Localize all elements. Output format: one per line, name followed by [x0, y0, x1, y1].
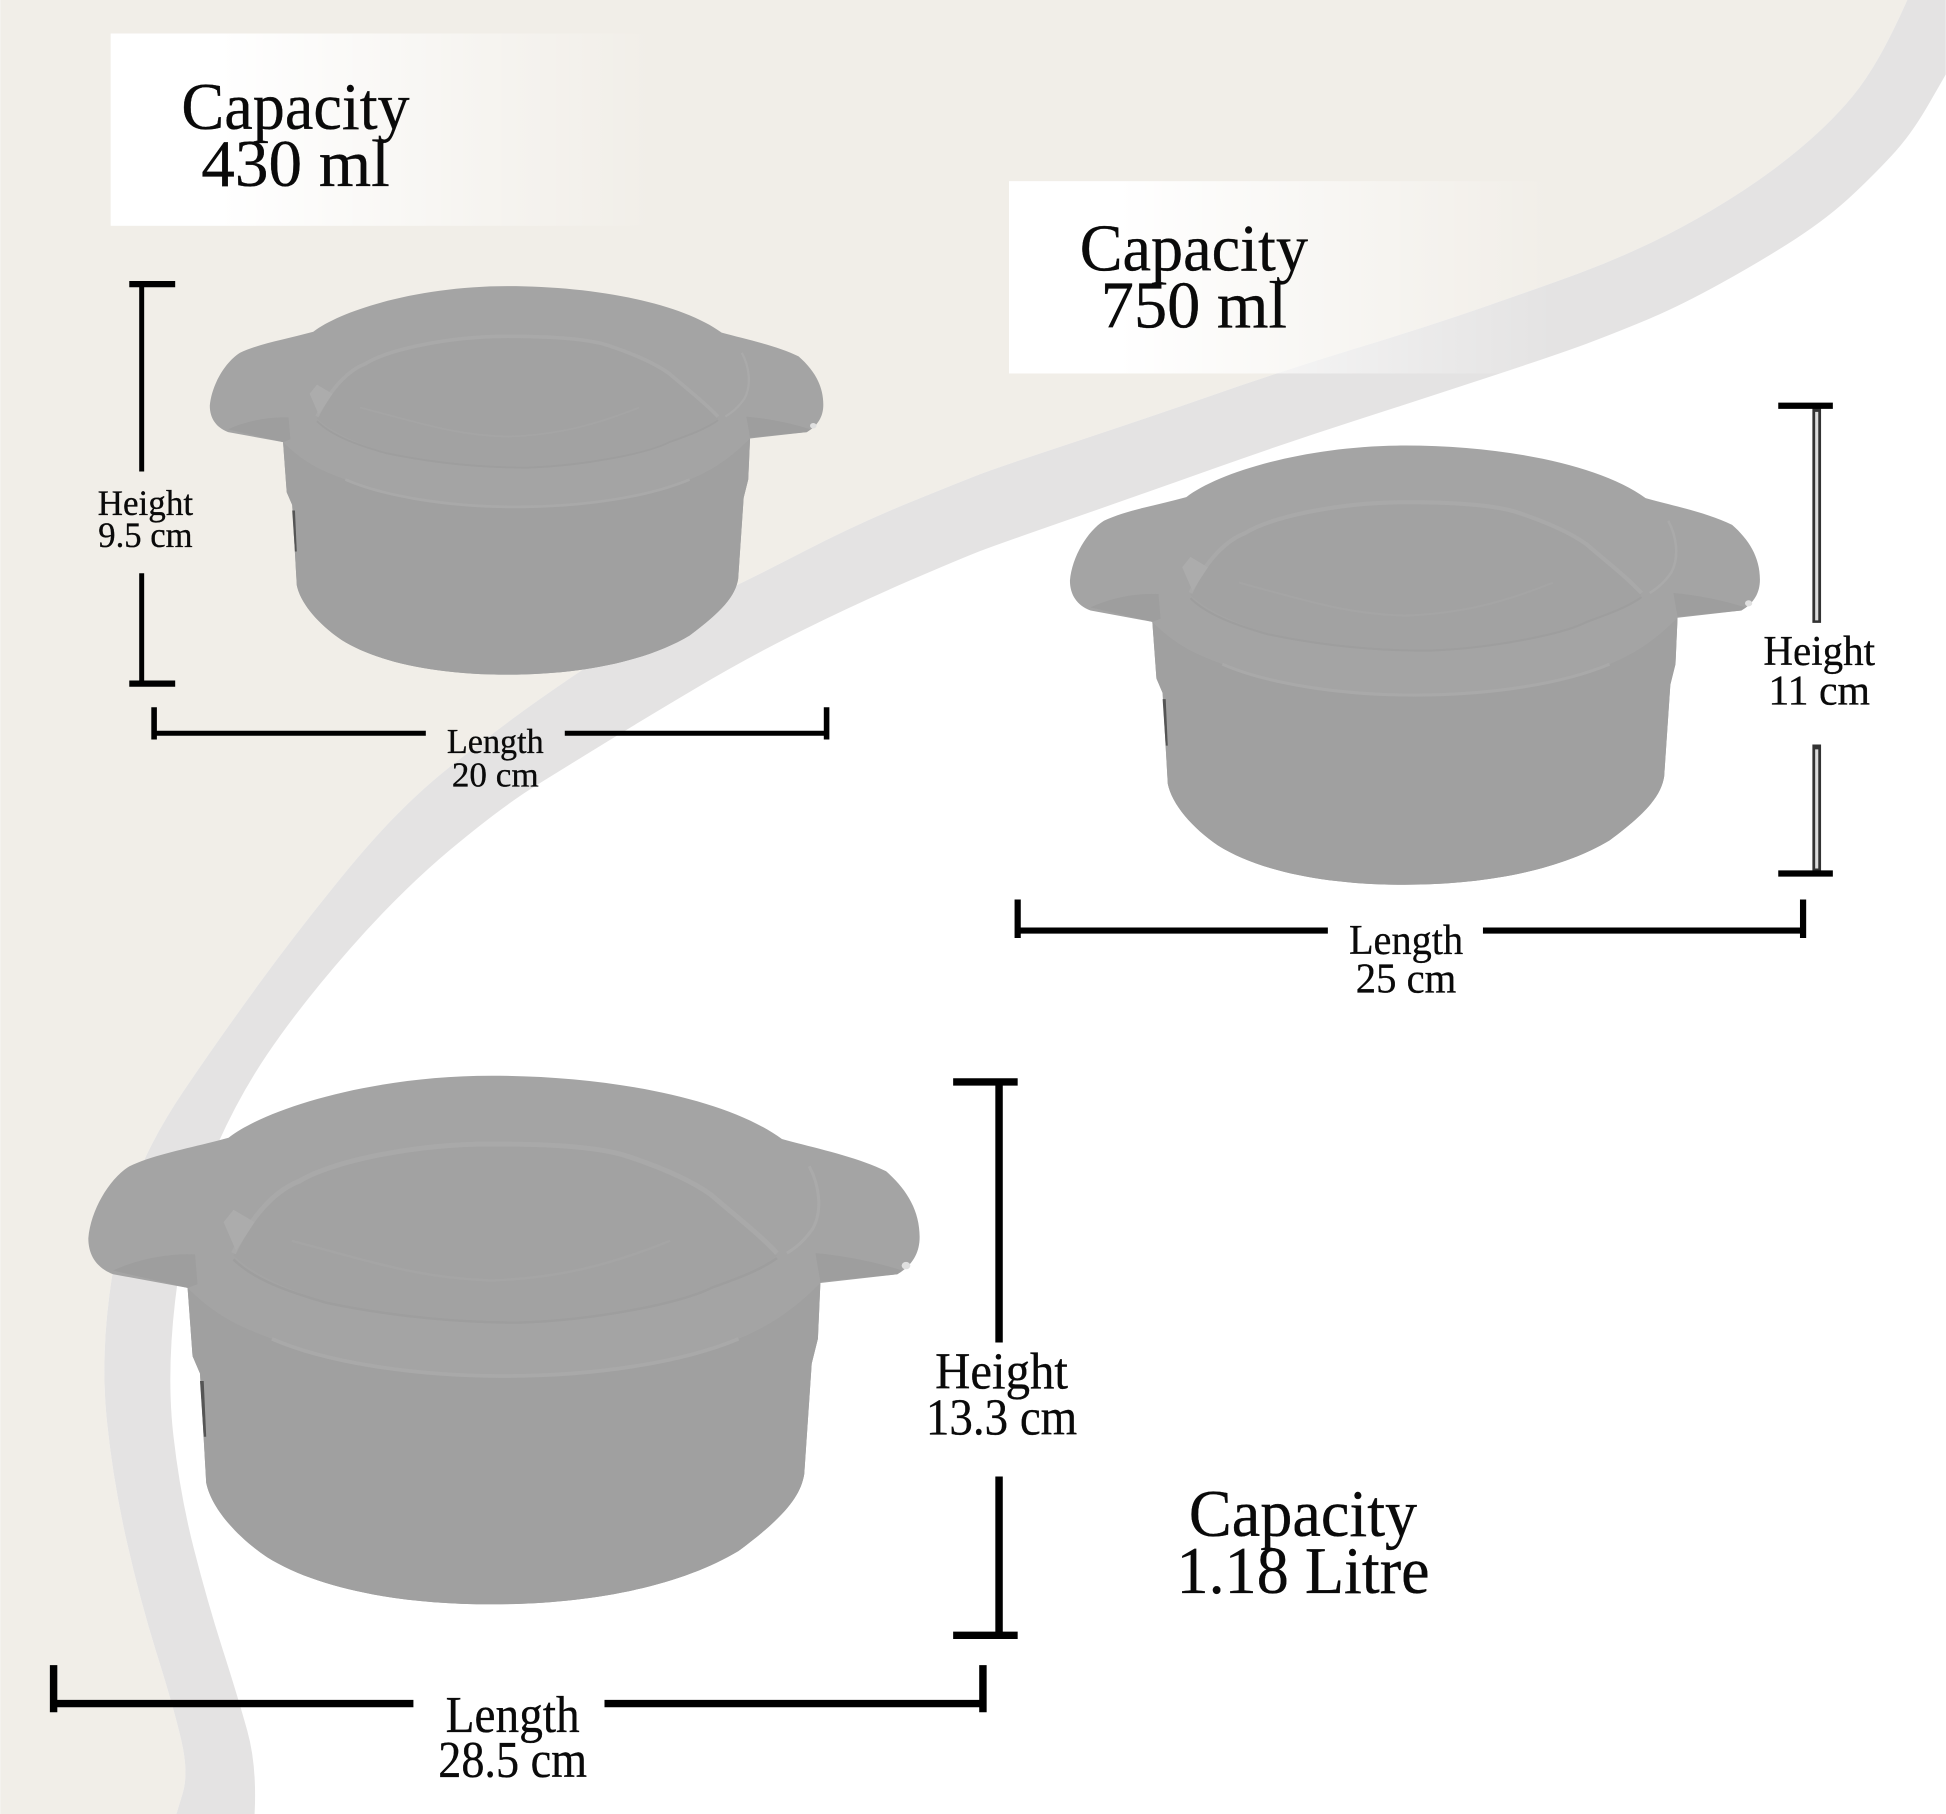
dimension: large length: 28.5 cm: [438, 1732, 587, 1789]
panel: 750 ml capacity label: [1009, 181, 1555, 373]
dimension: small length: Length: [447, 722, 544, 761]
dimension: large height: [926, 1082, 1077, 1635]
panel: 750 ml capacity label: 750 ml: [1101, 269, 1287, 343]
dimension: medium height: Height: [1763, 628, 1875, 675]
capacity label: 1.18 litre: [1176, 1477, 1430, 1608]
panel: 430 ml capacity label: [111, 34, 657, 226]
dimension: large length: Length: [446, 1687, 580, 1744]
dimension: medium length: 25 cm: [1356, 956, 1456, 1003]
capacity label: 1.18 litre: Capacity: [1189, 1477, 1418, 1551]
dimension: large length: [54, 1665, 983, 1789]
casserole: small: [210, 286, 823, 675]
dimension: small height: [98, 284, 193, 684]
dimension: large height: Height: [935, 1343, 1068, 1400]
panel: 430 ml capacity label: 430 ml: [201, 127, 390, 201]
dimension: small length: [154, 707, 827, 795]
dimension: small height: 9.5 cm: [98, 515, 193, 555]
dimension: small height: Height: [98, 483, 193, 523]
panel: 750 ml capacity label: Capacity: [1080, 211, 1308, 285]
capacity label: 1.18 litre: 1.18 Litre: [1176, 1534, 1430, 1608]
panel: 430 ml capacity label: Capacity: [181, 70, 410, 144]
casserole: large: [88, 1076, 920, 1604]
dimension: medium height: 11 cm: [1768, 668, 1870, 715]
dimension: medium height: [1763, 406, 1875, 873]
dimension: large height: 13.3 cm: [926, 1389, 1077, 1446]
casserole: medium: [1070, 446, 1760, 885]
dimension: medium length: Length: [1349, 917, 1463, 964]
dimension: medium length: [1018, 900, 1803, 1003]
dimension: small length: 20 cm: [452, 756, 539, 795]
